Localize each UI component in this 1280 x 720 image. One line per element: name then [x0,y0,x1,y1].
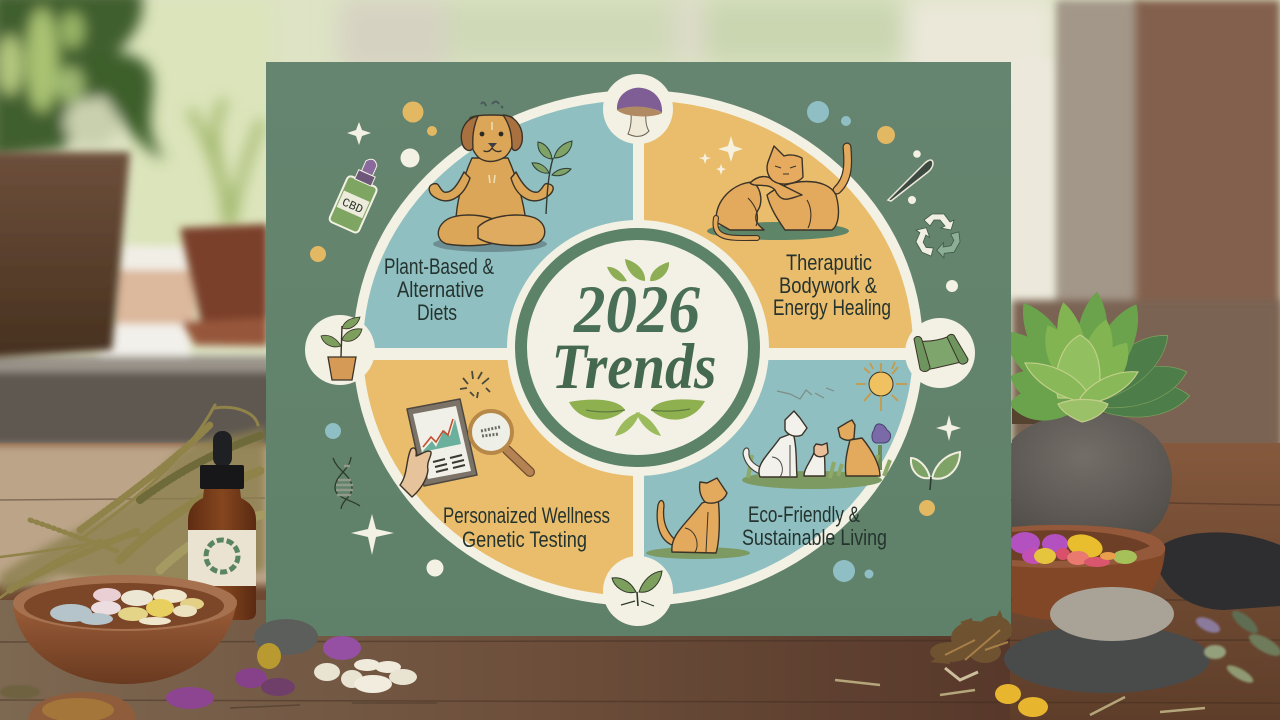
dried herbs [0,405,265,598]
wooden bowl with pills, left [13,575,237,684]
center title badge [507,220,769,476]
quadrant: sustainable living [644,360,912,594]
label: Plant-Based & Alternative Diets: Diets [417,300,457,325]
label: Plant-Based & Alternative Diets [384,254,494,325]
label: Theraputic Bodywork & Energy Healing: Theraputic [786,250,872,275]
wheel with four quadrants [350,90,934,606]
dropper bottle [188,431,256,620]
decorative dots, top right [807,101,958,292]
illustration: three cats on grass with sun [646,362,907,559]
black stone, right [1153,532,1280,610]
icon: sparkles [699,136,743,175]
label: Eco-Friendly & Sustainable Living: Eco-Friendly & [748,502,860,527]
label: Eco-Friendly & Sustainable Living: Sustainable Living [742,525,887,550]
quadrant: bodywork [644,102,912,348]
stacked stones and herbs, right [835,587,1280,717]
quadrant: genetic testing [350,360,633,600]
icon: magnifier [470,411,530,472]
dried herb clump [930,610,1012,664]
icon: DNA helix [333,457,360,509]
illustration: meditating dog [429,102,572,252]
icon: top leaves [607,259,669,281]
label: Theraputic Bodywork & Energy Healing: Bodywork & [779,273,877,298]
icon: purple mushroom [872,424,891,476]
medallion: mushroom [603,74,673,144]
decorative dots and star, bottom left [325,423,444,576]
label: Plant-Based & Alternative Diets: Plant-Based & [384,254,494,279]
label: Personaized Wellness Genetic Testing: Genetic Testing [462,527,587,552]
icon: sun with rays [856,362,907,411]
icon: recycle symbol [911,214,964,261]
label: Personaized Wellness Genetic Testing: Personaized Wellness [443,503,610,528]
icon: scattered molecules [460,371,490,398]
label: Personaized Wellness Genetic Testing [443,503,610,552]
decorative dots and stars, top left [310,102,437,262]
background: windowsill and ledge [0,246,275,454]
icon: bottom laurel leaves [569,399,705,436]
background: left blurred pots [0,152,268,358]
label: Eco-Friendly & Sustainable Living [742,502,887,550]
medallion: potted plant [305,315,375,385]
title: Trends: Trends [552,331,716,403]
title: 2026: 2026 [573,271,700,347]
decorative dots and star, bottom right [833,415,961,582]
scattered stones and pills on the table [0,619,437,720]
grey pot with succulent, right [992,290,1192,538]
label: Theraputic Bodywork & Energy Healing [773,250,891,320]
medallion: sprout [603,556,673,626]
label: Plant-Based & Alternative Diets: Alternative [397,277,484,302]
illustration: cats hugging [699,136,849,240]
icon: leaf sprig [532,141,572,214]
medallion: yoga mat scroll [905,318,975,388]
icon: acupuncture needle [888,160,933,201]
quadrant: plant-based diets [350,90,633,348]
icon: sprout sticker [911,452,960,490]
illustration: tablet, hand and magnifier [400,371,530,497]
lone orange cat [646,478,750,559]
icon: CBD oil bottle: CBD [340,195,365,217]
icon: hand [400,448,431,497]
background photo: room and window [0,0,1280,454]
icon: birds and branch [777,388,834,399]
icon: CBD oil bottle [328,153,388,234]
label: Theraputic Bodywork & Energy Healing: Energy Healing [773,295,891,320]
green board [266,62,1011,636]
wooden bowl with colorful candies, right [1010,525,1165,620]
background: left blurred foliage [0,0,262,225]
wooden table [0,443,1280,720]
